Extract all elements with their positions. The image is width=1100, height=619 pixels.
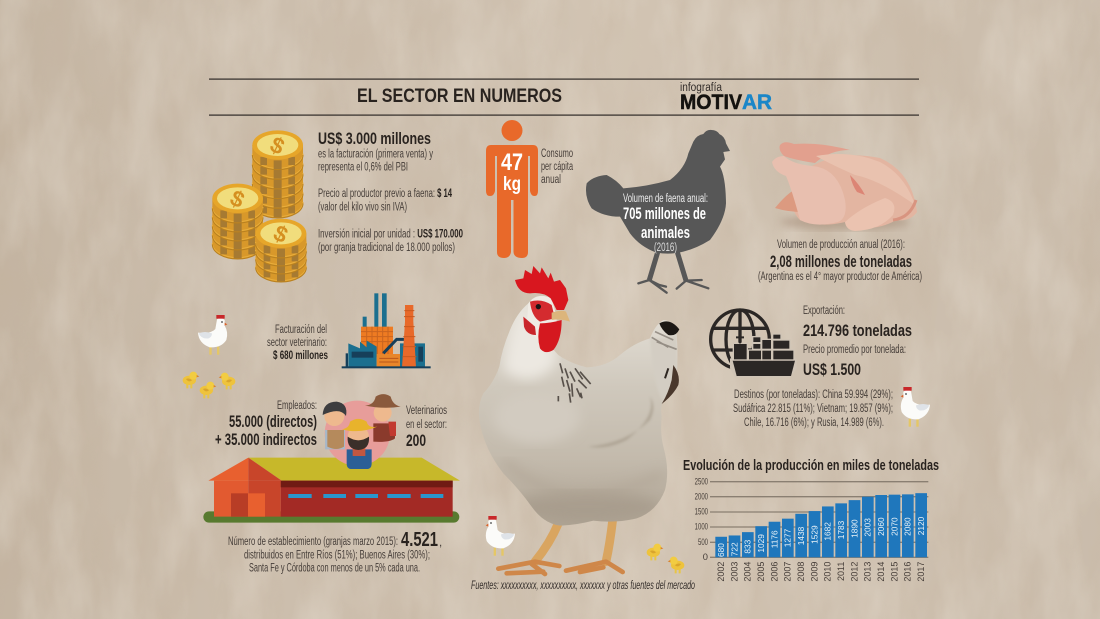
bar chart: produccion 2002-2017	[695, 476, 928, 582]
bar chart: produccion 2002-2017: 2120	[916, 516, 926, 535]
icon: gold coin stacks	[212, 130, 306, 282]
sources note: Fuentes: xxxxxxxxxx, xxxxxxxxxx, xxxxxxx y otras fuentes del mercado	[471, 580, 695, 592]
icon: globe and cargo ship	[711, 310, 797, 377]
text block: empleados: 55.000 (directos)	[229, 412, 317, 431]
icon: gold coin stacks: $	[226, 184, 249, 213]
text block: destinos: Sudáfrica 22.815 (11%); Vietnam; 19.857 (9%);	[733, 403, 893, 415]
logo: Infografia Motivar: infografía	[680, 82, 723, 94]
bar chart: produccion 2002-2017: 2003	[729, 562, 739, 582]
text block: establecimientos: distribuidos en Entre Ríos (51%); Buenos Aires (30%);	[244, 550, 430, 562]
icon: chicks left	[183, 372, 235, 398]
bar chart: produccion 2002-2017: 1277	[783, 528, 793, 547]
text block: empleados: Empleados:	[277, 400, 317, 412]
bar chart: produccion 2002-2017: 680	[716, 543, 726, 557]
bar chart: produccion 2002-2017: 1500	[695, 507, 708, 517]
bar chart: produccion 2002-2017: 2060	[876, 517, 886, 536]
icon: person with consumption figure: kg	[503, 174, 521, 195]
bar chart: produccion 2002-2017: 1529	[809, 525, 819, 544]
icon: chicks center	[647, 544, 684, 573]
text block: facturacion: US$ 3.000 millones	[318, 129, 431, 148]
icon: grey hen silhouette with slaughter volume: Volumen de faena anual:	[623, 193, 708, 205]
bar chart: produccion 2002-2017: 1682	[823, 522, 833, 541]
bar chart: produccion 2002-2017: 500	[698, 537, 708, 547]
bar chart: produccion 2002-2017: 2080	[903, 517, 913, 536]
text block: destinos: Chile, 16.716 (6%); y Rusia, 14.989 (6%).	[744, 417, 884, 429]
logo: Infografia Motivar: AR	[742, 91, 772, 114]
text block: empleados	[215, 400, 317, 449]
text block: destinos	[733, 389, 893, 429]
text block: establecimientos: ,	[439, 537, 442, 549]
text block: destinos: Destinos (por toneladas): China 59.994 (29%);	[734, 389, 893, 401]
icon: person with consumption figure	[486, 120, 538, 258]
text block: establecimientos: 4.521	[401, 529, 438, 551]
icon: person with consumption figure: 47	[501, 149, 523, 176]
icon: white hen center	[486, 516, 515, 556]
bar chart: produccion 2002-2017: 2008	[796, 562, 806, 582]
bar chart: produccion 2002-2017: 2007	[783, 562, 793, 582]
bar chart: produccion 2002-2017: 1029	[756, 534, 766, 553]
icon: grey hen silhouette with slaughter volume: animales	[641, 223, 690, 242]
bar chart: produccion 2002-2017: 722	[729, 542, 739, 556]
text block: empleados: + 35.000 indirectos	[215, 430, 317, 449]
bar chart: produccion 2002-2017: 2010	[823, 562, 833, 582]
label: consumo per capita: Consumo	[541, 148, 573, 160]
text block: facturacion: Precio al productor previo a faena: $ 14	[318, 188, 452, 200]
text block: facturacion: representa el 0,6% del PBI	[318, 162, 408, 174]
text block: veterinarios: Veterinarios	[406, 405, 447, 417]
text block: establecimientos	[228, 529, 442, 574]
icon: grey hen silhouette with slaughter volume: 705 millones de	[623, 204, 706, 223]
text block: exportacion	[803, 305, 912, 379]
text block: establecimientos: Santa Fe y Córdoba con menos de un 5% cada una.	[249, 562, 420, 574]
bar chart: produccion 2002-2017: 2016	[903, 562, 913, 582]
logo: Infografia Motivar	[680, 82, 772, 114]
text block: facturacion veterinaria	[267, 324, 328, 362]
icon: grey hen silhouette with slaughter volume	[586, 130, 730, 293]
text block: facturacion: (por granja tradicional de 18.000 pollos)	[318, 242, 455, 254]
bar chart: produccion 2002-2017: 2006	[769, 562, 779, 582]
title: EL SECTOR EN NUMEROS	[357, 86, 562, 107]
text block: facturacion	[318, 129, 463, 254]
bar chart: produccion 2002-2017: 2070	[889, 517, 899, 536]
bar chart: produccion 2002-2017: 833	[743, 539, 753, 554]
bar chart: produccion 2002-2017: 2011	[836, 562, 846, 581]
bar chart: produccion 2002-2017: 1783	[836, 520, 846, 539]
text block: produccion	[758, 239, 922, 283]
bar chart: produccion 2002-2017: 2004	[743, 562, 753, 582]
text block: produccion: (Argentina es el 4° mayor productor de América)	[758, 271, 922, 283]
bar chart: produccion 2002-2017: 2013	[863, 562, 873, 582]
illustration: three farmers	[323, 394, 401, 469]
icon: grey hen silhouette with slaughter volume: (2016)	[654, 242, 677, 254]
bar chart: produccion 2002-2017: 2500	[695, 476, 708, 486]
text block: establecimientos: Número de establecimiento (granjas marzo 2015):	[228, 536, 398, 548]
bar chart: produccion 2002-2017: 2012	[849, 562, 859, 582]
text block: facturacion veterinaria: sector veterinario:	[267, 337, 327, 349]
text block: facturacion: (valor del kilo vivo sin IVA)	[318, 202, 407, 214]
bar chart: produccion 2002-2017: 2009	[809, 562, 819, 582]
text block: produccion: 2,08 millones de toneladas	[770, 252, 912, 271]
bar chart: produccion 2002-2017: 2014	[876, 562, 886, 582]
bar chart: produccion 2002-2017: 2015	[889, 562, 899, 582]
logo: Infografia Motivar: MOTIV	[680, 91, 742, 114]
bar chart: produccion 2002-2017: 2000	[695, 491, 708, 501]
bar chart: produccion 2002-2017: 2003	[863, 518, 873, 537]
bar chart: produccion 2002-2017: 1000	[695, 522, 708, 532]
label: consumo per capita: per cápita	[541, 161, 573, 173]
bar chart: produccion 2002-2017: 2005	[756, 562, 766, 582]
bar chart: produccion 2002-2017: 1890	[849, 519, 859, 538]
bar chart: produccion 2002-2017: 1438	[796, 526, 806, 545]
label: consumo per capita: anual	[541, 174, 561, 186]
text block: exportacion: 214.796 toneladas	[803, 321, 912, 340]
text block: exportacion: Precio promedio por tonelada:	[803, 344, 906, 356]
text block: veterinarios: 200	[406, 431, 426, 450]
text block: exportacion: US$ 1.500	[803, 360, 861, 379]
icon: factory	[342, 293, 431, 368]
image: plucked chicken	[772, 142, 917, 231]
label: consumo per capita	[541, 148, 573, 186]
text block: facturacion: es la facturación (primera venta) y	[318, 148, 433, 160]
bar chart: produccion 2002-2017: 2017	[916, 562, 926, 582]
icon: gold coin stacks: $	[270, 219, 292, 248]
bar chart: produccion 2002-2017: 0	[703, 552, 708, 562]
bar chart: produccion 2002-2017: 2002	[716, 562, 726, 582]
text block: facturacion veterinaria: $ 680 millones	[273, 350, 328, 362]
illustration: poultry barn	[203, 458, 460, 523]
text block: exportacion: Exportación:	[803, 305, 845, 317]
header rule lines	[209, 78, 919, 116]
chart heading: Evolución de la producción en miles de toneladas	[683, 457, 939, 474]
image: large white hen	[479, 266, 679, 574]
icon: white hen left	[198, 315, 227, 355]
bar chart: produccion 2002-2017: 1176	[769, 530, 779, 548]
text block: produccion: Volumen de producción anual (2016):	[777, 239, 905, 251]
text block: veterinarios	[406, 405, 447, 450]
icon: white hen right	[901, 387, 930, 427]
text block: facturacion veterinaria: Facturación del	[275, 324, 327, 336]
text block: facturacion: Inversión inicial por unidad : US$ 170.000	[318, 228, 463, 240]
text block: veterinarios: en el sector:	[406, 419, 447, 431]
icon: gold coin stacks: $	[266, 131, 289, 160]
